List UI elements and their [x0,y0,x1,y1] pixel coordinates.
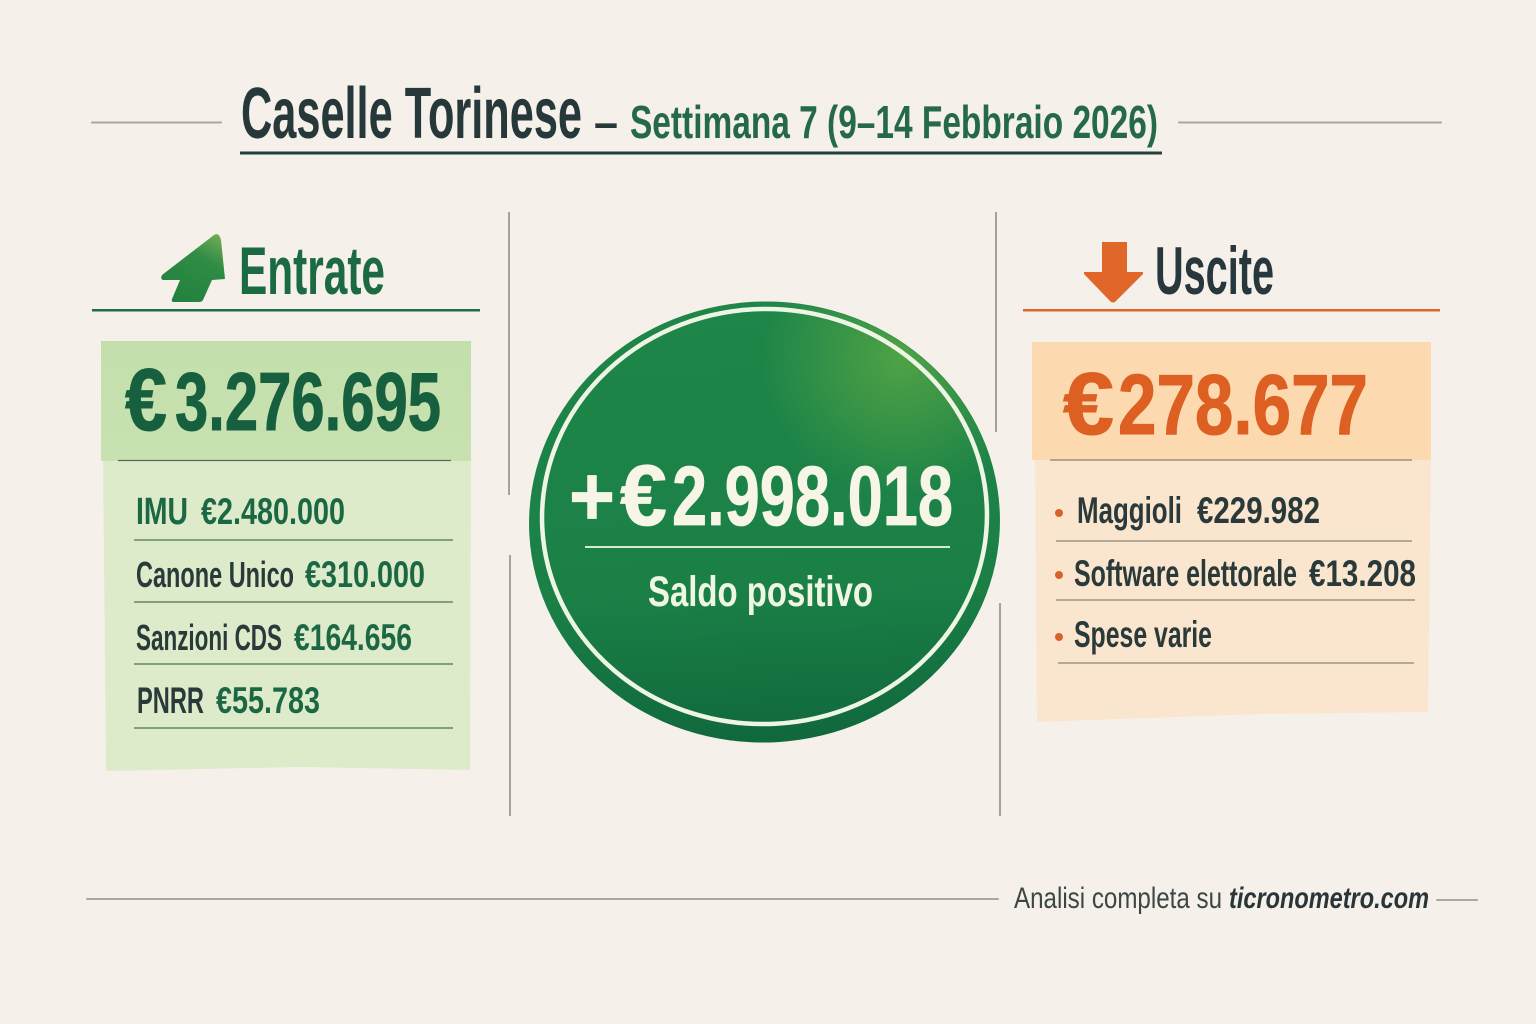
row: IMU: IMU [136,491,188,533]
title: place name: Caselle Torinese [241,74,582,154]
row: PNRR: €55.783 [216,680,320,721]
total: uscite: € [1063,354,1114,453]
row: Sanzioni CDS: Sanzioni CDS [136,617,282,658]
balance rule [585,546,950,548]
card body: uscite [1035,459,1431,722]
row: Software elettorale: Software elettorale [1074,553,1297,594]
row: Software elettorale: €13.208 [1309,553,1416,594]
footer text: Analisi completa su [1014,882,1222,915]
total: entrate: € [125,350,167,449]
row: Canone Unico: €310.000 [305,554,425,595]
balance amount: + [569,449,615,543]
panel: uscite [1023,233,1440,722]
row: Spese varie [1055,614,1212,655]
row: IMU [136,491,345,533]
row: Sanzioni CDS: €164.656 [294,617,412,658]
row: PNRR [137,680,320,721]
title underline [240,152,1162,154]
footer link: ticronometro.com [1229,882,1429,915]
disc inner ring [531,298,998,735]
footer [87,882,1477,915]
row: Maggioli [1055,490,1320,531]
total: entrate: 3.276.695 [175,355,441,448]
total: uscite: 278.677 [1118,358,1368,453]
total: entrate [125,350,441,449]
total: uscite [1063,354,1368,453]
uscite rule [1023,309,1440,312]
icon: up arrow [161,234,225,302]
balance label: Saldo positivo [648,568,873,616]
column dividers [509,212,1000,816]
row: Spese varie: Spese varie [1074,614,1212,655]
title [92,74,1441,154]
title: week and dates: Settimana 7 (9–14 Febbraio 2026) [630,96,1158,148]
row: Maggioli: €229.982 [1197,490,1320,531]
panel: entrate [92,233,480,771]
row: Maggioli: Maggioli [1077,490,1182,531]
disc [518,289,1011,755]
disc highlight [518,290,1011,754]
icon: down arrow [1084,242,1143,302]
panel: saldo [518,289,1011,755]
row: Canone Unico: Canone Unico [136,554,294,595]
heading: uscite: Uscite [1155,233,1274,309]
card header: uscite [1032,342,1431,460]
card body: entrate [103,460,471,771]
row: PNRR: PNRR [137,680,204,721]
card header: entrate [101,341,471,461]
title: dash: – [594,96,618,148]
heading: entrate: Entrate [239,233,385,309]
entrate rule [92,309,480,312]
row: IMU: €2.480.000 [201,491,345,532]
balance amount: 2.998.018 [672,449,953,543]
balance amount [569,448,953,544]
balance amount: € [620,448,667,544]
